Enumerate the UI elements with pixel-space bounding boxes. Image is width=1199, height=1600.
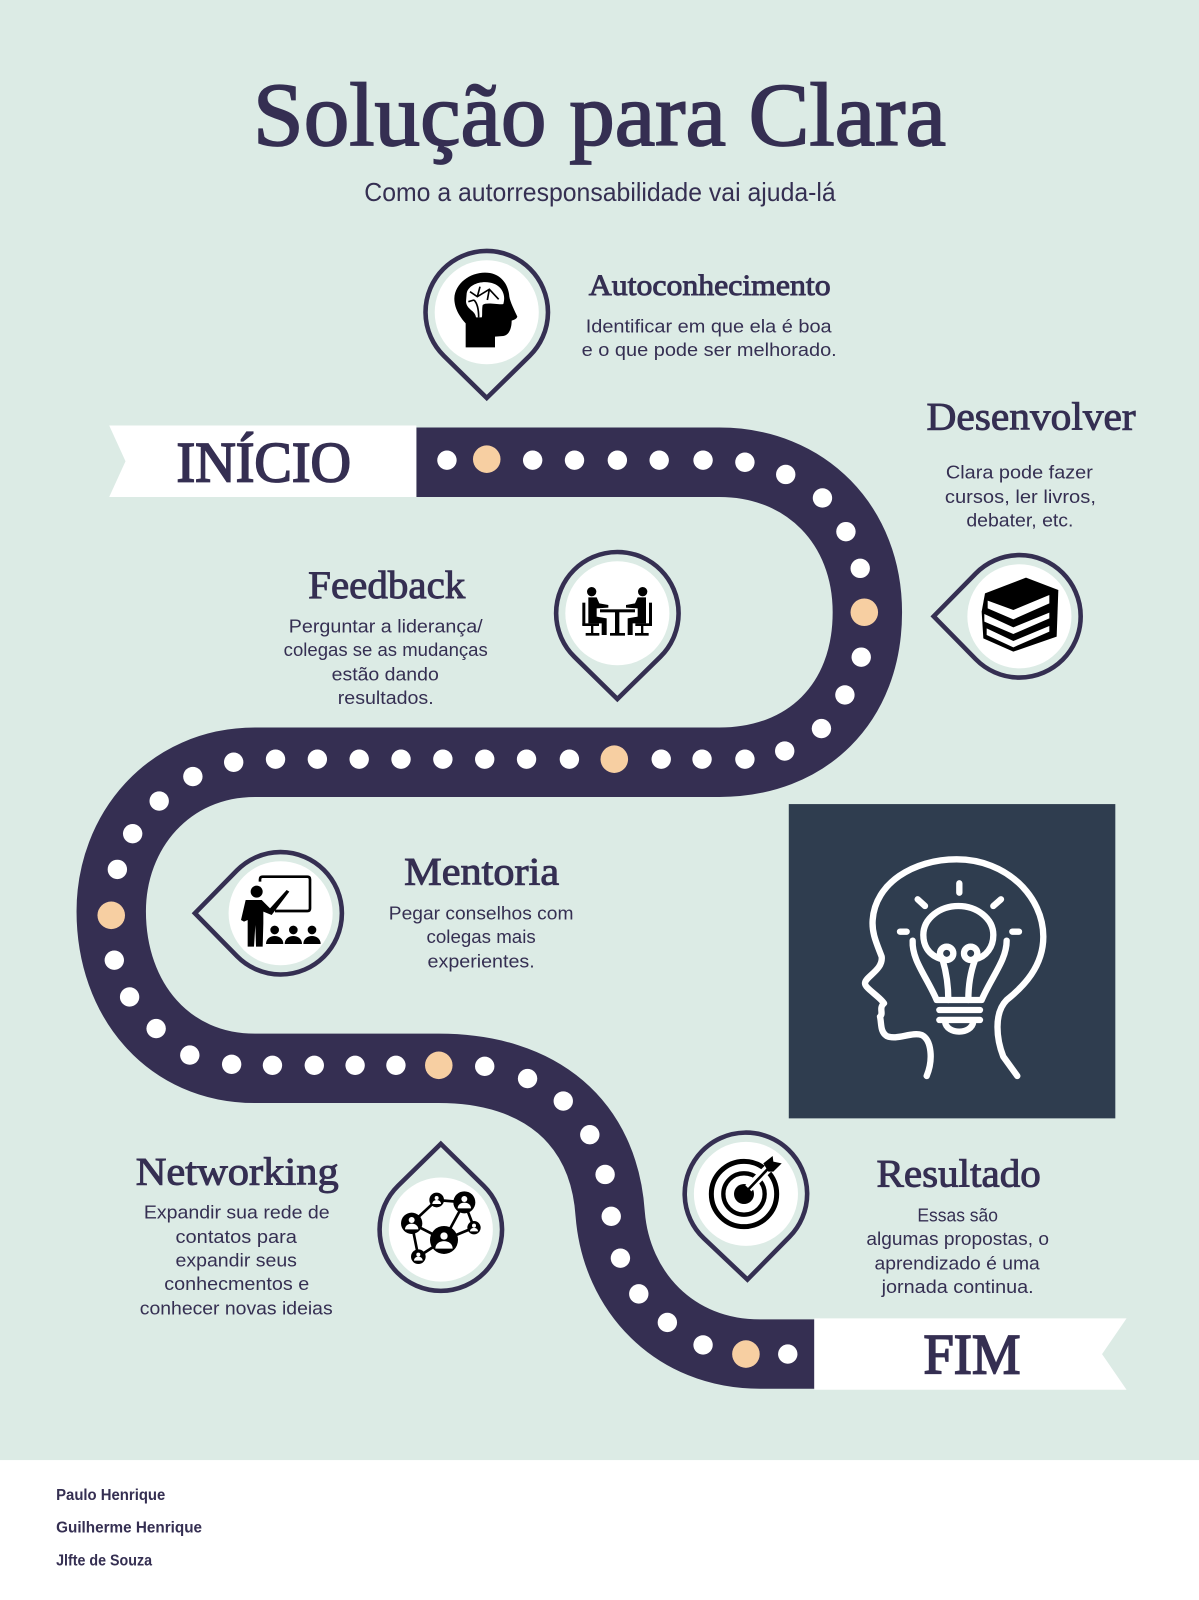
text: Mentoria [389,851,573,971]
text: Networking: contatos para [176,1226,298,1247]
road track [111,462,867,1354]
text: Feedback: Feedback [308,564,466,607]
text: Resultado: Essas são [917,1204,998,1225]
title: Solução para Clara [253,66,946,165]
text: Resultado: aprendizado é uma [874,1252,1041,1273]
text: Networking: expandir seus [176,1249,297,1270]
pin: Resultado [684,1132,809,1281]
text: Networking: Networking [136,1151,339,1194]
text: Feedback: estão dando [332,664,439,685]
illustration panel: head with light bulb [789,804,1115,1118]
text: Feedback [284,564,488,708]
text: Networking: conhecmentos e [164,1273,309,1294]
text: Resultado [866,1153,1049,1297]
text: Autoconhecimento: e o que pode ser melhorado. [582,339,837,360]
footer credits: Guilherme Henrique [56,1520,202,1537]
text: Desenvolver [927,396,1136,531]
pin: Feedback [556,552,679,699]
icon: two people at a table [582,587,652,636]
text: Mentoria: Mentoria [404,851,559,894]
end ribbon [814,1318,1127,1390]
text: Resultado: algumas propostas, o [866,1228,1049,1249]
text: Autoconhecimento: Identificar em que ela é boa [586,316,832,337]
pin: Networking [380,1144,502,1291]
pin: Mentoria [195,852,342,974]
start ribbon [109,426,416,497]
text: Feedback: resultados. [338,687,434,708]
text: Resultado: Resultado [877,1153,1041,1196]
peach milestone dots [97,445,878,1368]
text: Feedback: colegas se as mudanças [284,639,488,660]
text: Autoconhecimento: Autoconhecimento [589,270,831,302]
icon: teacher at a board [241,877,321,947]
icon: people network [401,1191,481,1264]
icon: head with brain [454,273,517,347]
subtitle: Como a autorresponsabilidade vai ajuda-lá [364,179,837,207]
footer credits [56,1487,202,1569]
text: Autoconhecimento [582,270,837,360]
footer panel [0,1460,1199,1600]
text: Networking: conhecer novas ideias [140,1297,333,1318]
white road dots [105,451,871,1364]
road with stops [97,445,878,1368]
text: Desenvolver: Desenvolver [927,396,1136,439]
text: Desenvolver: cursos, ler livros, [945,486,1096,507]
text: Mentoria: experientes. [428,950,535,971]
pin: Desenvolver [934,555,1081,678]
text: Mentoria: colegas mais [427,926,536,947]
text: Networking [136,1151,339,1318]
icon: target with arrow [711,1156,782,1227]
text: Networking: Expandir sua rede de [144,1201,330,1222]
end label: FIM [923,1323,1020,1386]
text: Desenvolver: debater, etc. [966,510,1073,531]
icon: head and bulb line art [865,859,1043,1076]
text: Mentoria: Pegar conselhos com [389,902,573,923]
start label: INÍCIO [177,432,351,495]
icon: stack of books [982,578,1058,652]
footer credits: Jlfte de Souza [56,1552,153,1569]
footer credits: Paulo Henrique [56,1487,165,1504]
text: Desenvolver: Clara pode fazer [946,462,1093,483]
pin: Autoconhecimento [426,251,548,398]
text: Feedback: Perguntar a liderança/ [289,616,484,637]
text: Resultado: jornada continua. [881,1276,1034,1297]
